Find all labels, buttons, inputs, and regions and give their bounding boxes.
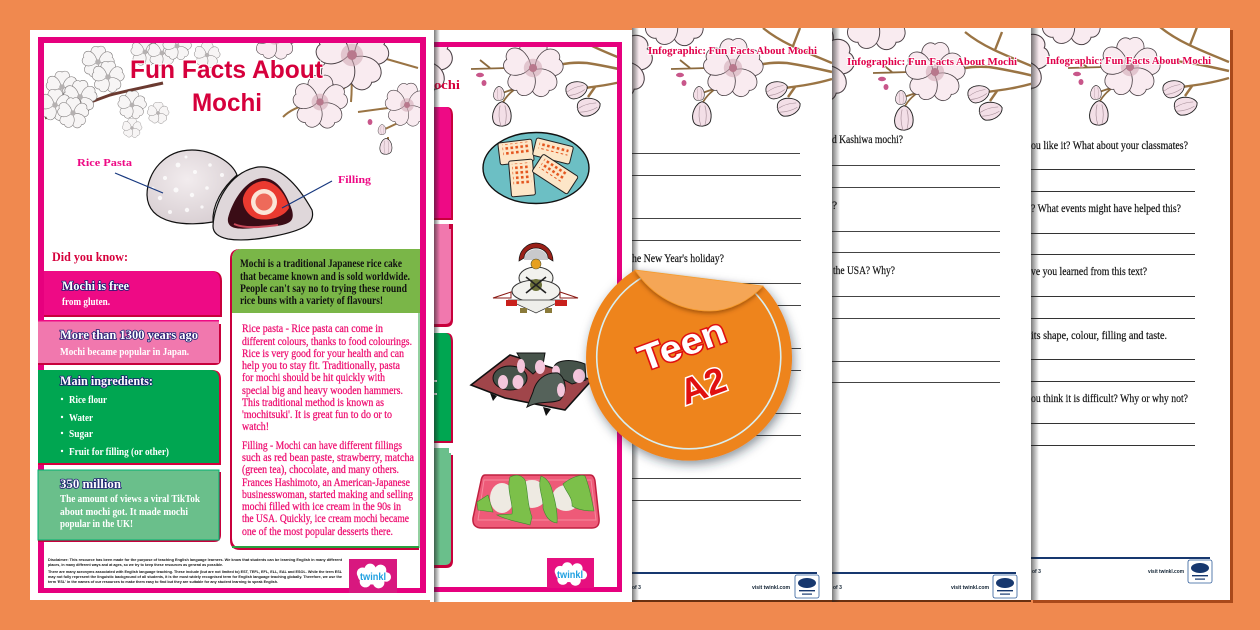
questions page 2: ? (832, 200, 837, 212)
fact: gluten free: from gluten. (62, 297, 110, 308)
rice pasta text: Rice is very good for your health and can (242, 348, 404, 360)
fact: 1300 years (38, 320, 221, 365)
rice pasta text: watch! (242, 421, 269, 433)
fact: 350 million: popular in the UK! (60, 519, 133, 530)
disclaimer: places, in many different ways and at ages, so we try to keep these resources as general as possible. (48, 562, 223, 567)
rice pasta text: for mochi should be hit quickly with (242, 372, 385, 384)
rice pasta text (242, 323, 412, 433)
partial heading: ochi (434, 77, 460, 92)
title: Mochi (192, 89, 262, 117)
blossom decoration page 3 (1031, 28, 1230, 126)
filling text: Filling - Mochi can have different fillings (242, 440, 402, 452)
fact: 1300 years: More than 1300 years ago (60, 327, 198, 342)
logo poster (349, 559, 397, 593)
fact: main ingredients: Rice flour (69, 395, 107, 406)
filling text: one of the most popular desserts there. (242, 526, 393, 538)
questions page 2: d Kashiwa mochi? (832, 134, 903, 146)
illustration: kagami mochi (493, 243, 578, 313)
poster page 1: Fun Facts About Mochi (30, 16, 434, 600)
footer page 3: visit twinkl.com (1148, 569, 1185, 575)
intro text: that became known and is sold worldwide. (240, 271, 410, 283)
fact: 1300 years: Mochi became popular in Japan. (60, 347, 189, 358)
fact: main ingredients: Sugar (69, 429, 93, 440)
worksheet page 3 (1031, 28, 1233, 603)
questions page 3: ve you learned from this text? (1031, 266, 1147, 278)
footer page 1: visit twinkl.com (752, 585, 791, 591)
fact: main ingredients (38, 370, 221, 465)
label: rice pasta: Rice Pasta (77, 157, 133, 169)
disclaimer: may not fully represent the linguistic background of all students, it is the most widely recognised term for English language teaching globally. Therefore, we use the (48, 574, 343, 579)
disclaimer: There are many acronyms associated with English language teaching. These include (but are not limited to) EST, TEFL, EFL, ELL, EAL and ESOL. While the term ESL (48, 569, 343, 574)
rice pasta text: help you to stay fit. Traditionally, pasta (242, 360, 400, 372)
title: Fun Facts About (130, 56, 324, 84)
logo poster: twinkl (360, 572, 386, 583)
fact: gluten free (44, 271, 222, 317)
fact: main ingredients: Water (69, 413, 93, 424)
questions page 3: its shape, colour, filling and taste. (1031, 330, 1167, 342)
pink frame page 2 (434, 42, 622, 592)
illustration: grilled mochi on plate (483, 132, 589, 204)
questions page 2 (832, 134, 903, 277)
fact: main ingredients: Main ingredients: (60, 373, 153, 388)
fact: 350 million (38, 470, 221, 542)
disclaimer: term 'ESL' in the names of our resources to make them easy to find but they are suitable for any student learning to speak English. (48, 579, 278, 584)
questions page 3: ou think it is difficult? Why or why not? (1031, 393, 1188, 405)
logo page 2 (547, 558, 594, 588)
intro text (240, 258, 410, 307)
whole mochi (147, 150, 237, 224)
filling text: the USA. Quickly, ice cream mochi became (242, 513, 409, 525)
badge text: A2: A2 (674, 358, 731, 413)
worksheet page 1 (632, 28, 832, 602)
worksheet page 2 (832, 28, 1031, 602)
filling text: (green tea), chocolate, and many others. (242, 464, 399, 476)
badge inner ring (597, 277, 781, 449)
box edges behind poster (434, 107, 453, 568)
footer page 3: of 3 (1032, 569, 1041, 575)
cut mochi with strawberry filling (213, 167, 313, 240)
filling text: Frances Hashimoto, an American-Japanese (242, 477, 410, 489)
logo page 2: twinkl (557, 570, 583, 581)
did you know heading: Did you know: (52, 249, 128, 264)
fact: main ingredients: Fruit for filling (or other) (69, 447, 169, 458)
rice pasta text: 'mochitsuki'. It is great fun to do or to (242, 409, 392, 421)
disclaimer: Disclaimer: This resource has been made for the purpose of teaching English language learners. We know that students can be learning English in many different (48, 557, 343, 562)
footer page 1: of 3 (632, 585, 641, 591)
label: filling: Filling (338, 174, 372, 186)
footer page 3 (1031, 557, 1212, 583)
worksheet title page 3: Infographic: Fun Facts About Mochi (1046, 55, 1211, 67)
rice pasta text: different colours, thanks to food colourings. (242, 336, 412, 348)
blossom decoration poster (44, 43, 420, 155)
worksheet title page 2: Infographic: Fun Facts About Mochi (847, 56, 1017, 68)
questions page 3 (1031, 140, 1188, 405)
rice pasta text: Rice pasta - Rice pasta can come in (242, 323, 383, 335)
illustration: kashiwa mochi on tray (473, 475, 599, 528)
disclaimer (48, 557, 343, 584)
filling text: such as red bean paste, strawberry, matcha (242, 452, 414, 464)
intro text: Mochi is a traditional Japanese rice cake (240, 258, 402, 270)
fact: 350 million: The amount of views a viral TikTok (60, 494, 200, 505)
rice pasta text: This traditional method is known as (242, 397, 384, 409)
fact: 350 million: about mochi got. It made mochi (60, 507, 188, 518)
poster page 2: illustrations (430, 30, 632, 602)
questions page 3: ? What events might have helped this? (1031, 203, 1181, 215)
worksheet title page 1: Infographic: Fun Facts About Mochi (648, 45, 817, 57)
questions page 2: the USA? Why? (833, 265, 895, 277)
blossom decoration (434, 47, 617, 127)
filling text (242, 440, 414, 538)
leader lines (115, 173, 332, 208)
mochi illustration (77, 150, 372, 240)
blossom decoration page 2 (832, 28, 1031, 131)
pink frame (38, 37, 426, 593)
fact: gluten free: Mochi is free (62, 278, 129, 293)
rice pasta text: special big and heavy wooden hammers. (242, 385, 403, 397)
footer page 2: of 3 (833, 585, 842, 591)
intro text: rice buns with a variety of flavours! (240, 295, 383, 307)
fact: 350 million: 350 million (60, 476, 122, 491)
badge text: Teen: Teen (633, 310, 731, 379)
badge: Teen A2 (586, 270, 792, 461)
filling text: mochi filled with ice cream in the 90s in (242, 501, 401, 513)
footer page 1 (632, 572, 819, 598)
illustration: sakura mochi on tray (471, 353, 592, 416)
title (130, 56, 324, 117)
filling text: businesswoman, started making and selling (242, 489, 413, 501)
badge fold (635, 270, 763, 311)
intro text: People can't say no to trying these round (240, 283, 407, 295)
questions page 3: ou like it? What about your classmates? (1031, 140, 1188, 152)
footer page 2 (832, 572, 1017, 598)
footer page 2: visit twinkl.com (951, 585, 990, 591)
question page 1: he New Year's holiday? (632, 253, 724, 265)
panel: mochi description (230, 249, 420, 550)
blossom decoration page 1 (632, 28, 832, 127)
